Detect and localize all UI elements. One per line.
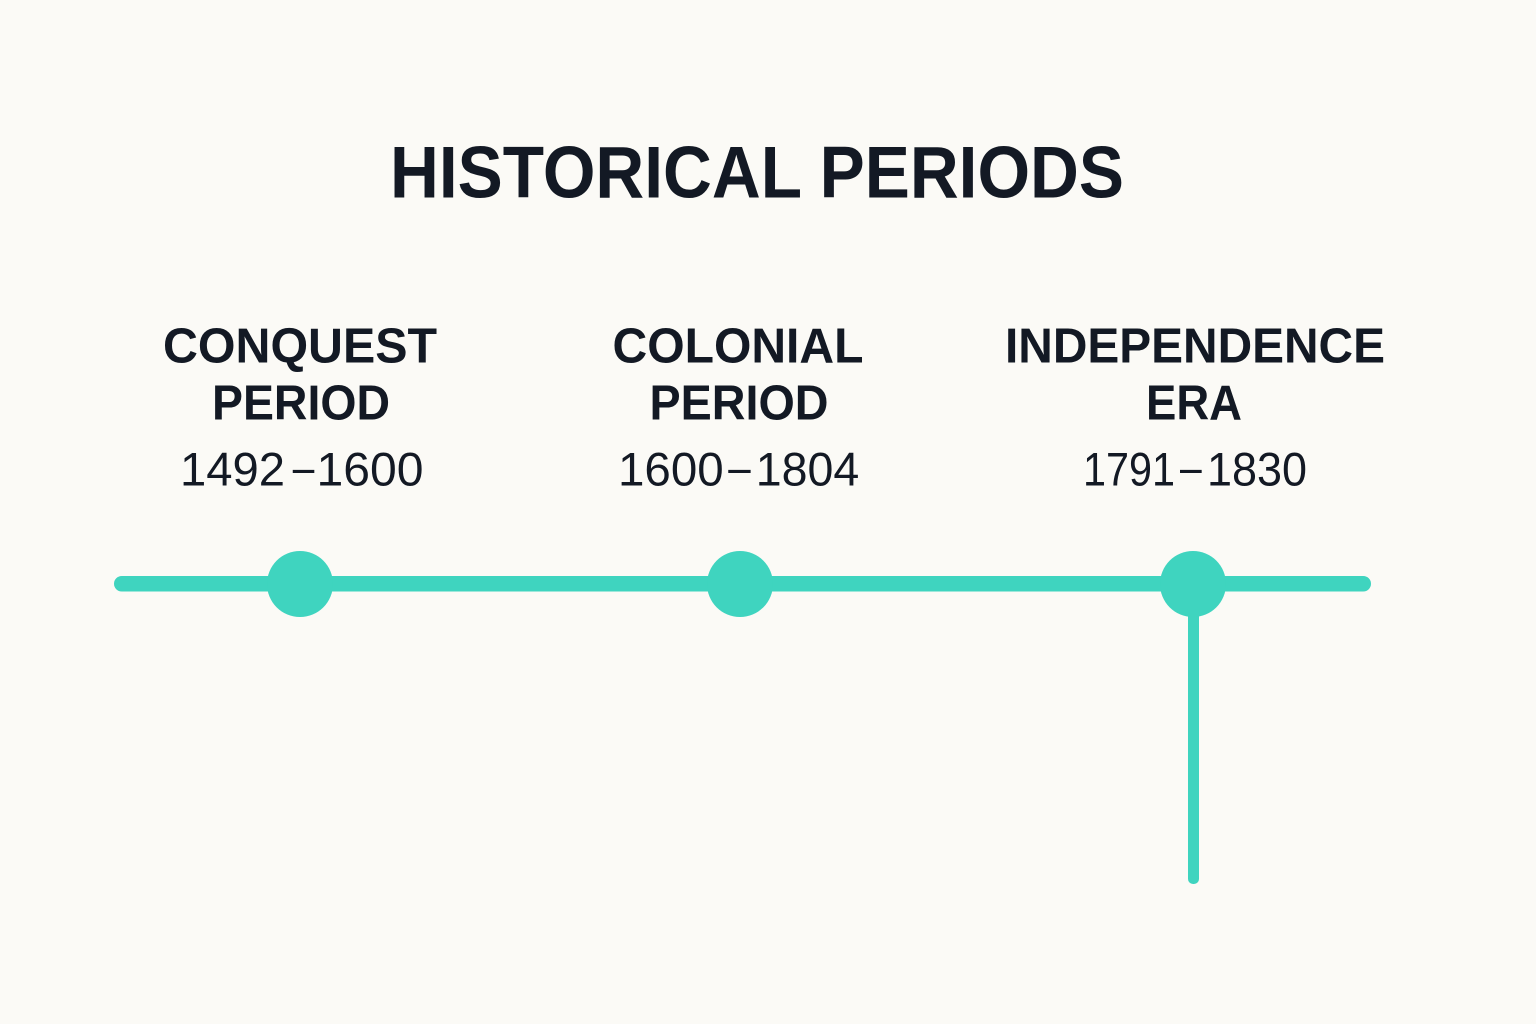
timeline bbox=[114, 551, 1371, 884]
heading: independence era: INDEPENDENCE bbox=[1005, 320, 1385, 374]
heading: conquest period: PERIOD bbox=[212, 376, 390, 430]
marker: colonial bbox=[707, 551, 773, 617]
dates: 1600–1804: 1600 bbox=[618, 444, 724, 496]
heading: colonial period bbox=[612, 320, 864, 430]
dates: 1791–1830: – bbox=[1180, 442, 1202, 494]
heading: independence era: ERA bbox=[1146, 376, 1242, 430]
title: HISTORICAL PERIODS bbox=[390, 132, 1124, 214]
dates: 1600–1804: 1804 bbox=[756, 444, 859, 496]
dates: 1600–1804: – bbox=[728, 442, 751, 494]
dates: 1791–1830: 1791 bbox=[1083, 444, 1175, 496]
marker: independence bbox=[1160, 551, 1226, 617]
heading: conquest period: CONQUEST bbox=[163, 320, 437, 374]
period: conquest bbox=[163, 320, 437, 496]
dates: 1492–1600: 1600 bbox=[316, 444, 424, 496]
horizontal timeline bar bbox=[114, 576, 1371, 592]
period: independence bbox=[1005, 320, 1385, 496]
period: colonial bbox=[612, 320, 864, 496]
heading: colonial period: PERIOD bbox=[650, 376, 828, 430]
heading: colonial period: COLONIAL bbox=[612, 320, 864, 374]
dates: 1492–1600: – bbox=[293, 442, 315, 494]
heading: conquest period bbox=[163, 320, 437, 430]
dates: 1492–1600: 1492 bbox=[180, 444, 285, 496]
heading: independence era bbox=[1005, 320, 1385, 430]
marker: conquest bbox=[267, 551, 333, 617]
dates: 1791–1830: 1830 bbox=[1207, 444, 1307, 496]
vertical branch line bbox=[1188, 600, 1199, 884]
